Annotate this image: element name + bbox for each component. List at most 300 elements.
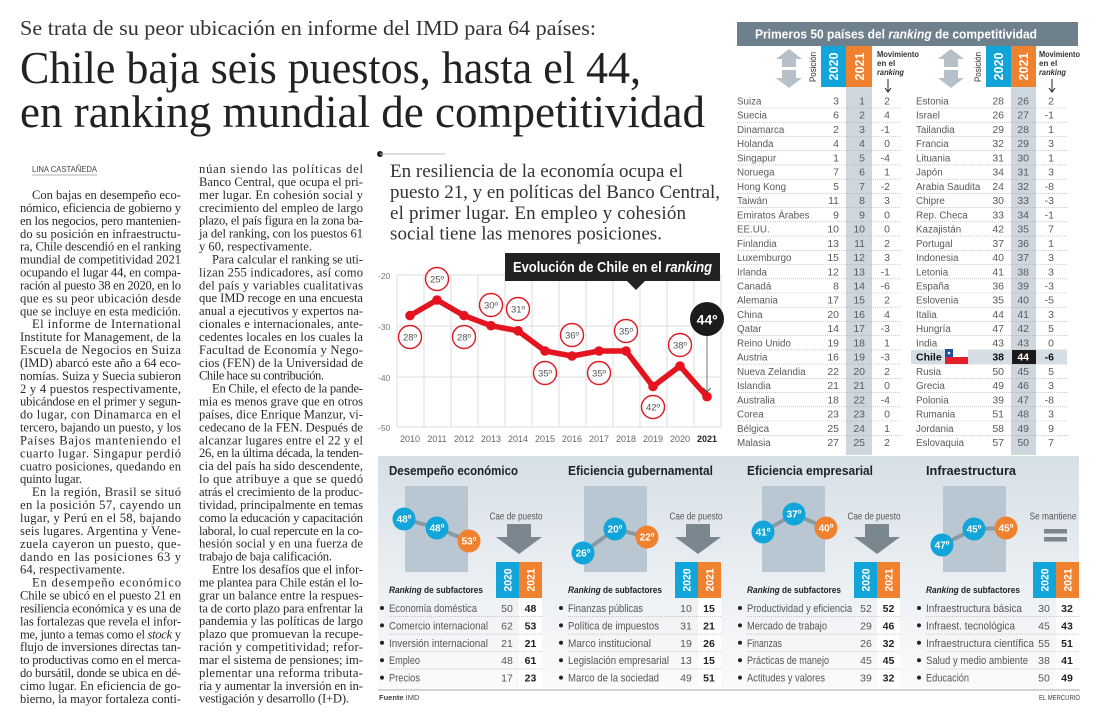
left table rows: 1 [884, 167, 890, 179]
right table rows: 39 [1017, 280, 1029, 292]
left table rows: Irlanda [737, 267, 768, 278]
left table rows: Suecia [737, 111, 768, 122]
subfactor table: Ranking de subfactores [389, 585, 483, 595]
right table column heads: en el [1039, 59, 1057, 68]
right table rows: Italia [916, 310, 937, 321]
article text column 2: y 60, respectivamente. [199, 240, 312, 254]
left table rows: 27 [827, 437, 839, 449]
article text column 1: en los negocios, pero mantenien- [20, 214, 181, 228]
left table rows: 13 [853, 266, 865, 278]
left table column heads: Movimiento [877, 50, 919, 59]
article text column 1: resiliencia económica y es una de [20, 601, 181, 615]
mini chart: 45º [967, 524, 982, 536]
year axis: 2013 [481, 434, 501, 444]
subfactor table: 2021 [704, 568, 716, 592]
left table rows: Nueva Zelandia [737, 367, 806, 378]
right table rows: Rusia [916, 367, 942, 378]
subfactor table: Ranking de subfactores [568, 585, 662, 595]
year axis: 2017 [589, 434, 609, 444]
right table rows: 5 [1048, 323, 1054, 335]
article text column 2: plazo, el país figura en la zona ba- [199, 214, 363, 228]
article text column 1: dando en las posiciones 63 y [20, 550, 182, 564]
equal sign: se mantiene: Se mantiene [1030, 512, 1077, 522]
right table rows: 38 [1017, 266, 1029, 278]
year axis: 2019 [643, 434, 663, 444]
value labels [398, 268, 692, 418]
right table rows: 49 [992, 380, 1004, 392]
ranking table: primeros 50 países [737, 22, 1080, 455]
table title bar: Primeros 50 países del ranking de competitividad [755, 28, 1037, 42]
mini chart: 45º [999, 524, 1014, 534]
article text column 2: tividad, principalmente en temas [199, 498, 363, 512]
article text column 2: Entre los desafíos que el infor- [212, 562, 363, 576]
left table rows: 16 [853, 309, 865, 321]
left table column heads [776, 46, 919, 455]
subfactor table: 17 [501, 673, 513, 685]
subfactor table: 10 [680, 603, 692, 615]
right table rows: 24 [992, 181, 1004, 193]
right table rows: 28 [992, 96, 1004, 108]
left table rows: Qatar [737, 324, 762, 335]
article text column 1: tercero, bajando un puesto, y los [20, 421, 181, 435]
right table column heads: ranking [1039, 68, 1066, 77]
panel: infraestructura [917, 463, 1079, 688]
right table rows: 50 [992, 366, 1004, 378]
left table column heads: Posición [808, 52, 818, 82]
article text column 1: ración al puesto 38 en 2020, en lo [20, 278, 181, 292]
right table rows: 42 [992, 224, 1004, 236]
left table rows: 14 [853, 280, 865, 292]
mini chart [930, 486, 1018, 572]
trend arrow: Cae de puesto [848, 512, 901, 522]
right table rows: 29 [992, 124, 1004, 136]
subfactor table: Infraestructura científica [926, 638, 1035, 650]
subfactor table: Legislación empresarial [568, 655, 669, 667]
left table rows: 10 [853, 224, 865, 236]
mini chart: 20º [608, 524, 623, 536]
subfactor table: 2020 [1040, 568, 1052, 592]
right table rows: 32 [1017, 181, 1029, 193]
footer: source and credit: EL MERCURIO [1039, 695, 1080, 702]
right table rows: 46 [1017, 380, 1029, 392]
subfactor table: 15 [703, 603, 715, 615]
trend arrow: Cae de puesto [670, 512, 723, 522]
right table column heads [938, 46, 1080, 455]
left table rows: Taiwán [737, 196, 768, 207]
article text column 1: 2 y 4 puestos respectivamente, [20, 382, 181, 396]
right table rows: 3 [1048, 266, 1054, 278]
mini chart: 47º [935, 540, 950, 552]
value labels: 28º [457, 332, 472, 344]
article text column 1: En la región, Brasil se situó [32, 485, 181, 499]
subfactor table: 2021 [884, 568, 896, 592]
article text column 2: laboral, lo cual repercute en la co- [199, 524, 363, 538]
highlighted 2021 value [690, 302, 724, 392]
subfactor table: 45 [1038, 620, 1050, 632]
pull quote: el primer lugar. En empleo y cohesión [390, 203, 686, 224]
right table rows: 44 [992, 309, 1004, 321]
left table rows: Malasia [737, 438, 771, 449]
subfactor table: Marco de la sociedad [568, 673, 659, 685]
subfactor table: Política de impuestos [568, 620, 659, 632]
left table rows: Alemania [737, 296, 778, 307]
value labels: 35º [619, 326, 634, 338]
article text column 2: anual a ejecutivos y expertos na- [199, 304, 363, 318]
right table rows: 9 [1048, 423, 1054, 435]
right table rows: 33 [992, 209, 1004, 221]
left table rows: 12 [853, 252, 865, 264]
left table rows: 21 [827, 380, 839, 392]
subfactor table: 55 [1038, 638, 1050, 650]
panel: desempeño económico [380, 463, 543, 688]
article text column 1: me, junto a temas como el stock y [20, 627, 182, 641]
right table rows: 45 [1017, 366, 1029, 378]
subfactor table: Precios [389, 673, 420, 685]
value labels: 36º [565, 330, 580, 342]
article text column 1: do lugar, con Dinamarca en el [20, 408, 182, 422]
right table rows: 1 [1048, 152, 1054, 164]
left table column heads: ranking [877, 68, 904, 77]
left table rows: 7 [859, 181, 865, 193]
left table column heads: en el [877, 59, 895, 68]
value labels: 28º [403, 332, 418, 344]
left table rows: Reino Unido [737, 338, 791, 349]
left table rows: Dinamarca [737, 125, 785, 136]
year axis: 2012 [454, 434, 474, 444]
subfactor table: 45 [883, 655, 894, 667]
right table rows: 7 [1048, 437, 1054, 449]
right table rows: Israel [916, 111, 940, 122]
subfactor table: 49 [680, 673, 692, 685]
right table rows: -1 [1045, 110, 1054, 122]
pull quote: En resiliencia de la economía ocupa el [390, 161, 683, 182]
article text column 1: quinto lugar. [20, 472, 82, 486]
value labels: 35º [538, 368, 553, 380]
left table rows: 21 [853, 380, 865, 392]
table title bar [737, 22, 1078, 46]
trend arrow [848, 512, 901, 554]
left table rows: 15 [853, 295, 865, 307]
right table rows: -1 [1045, 209, 1054, 221]
right table rows: -8 [1045, 181, 1054, 193]
left table rows: 7 [833, 167, 839, 179]
subfactor table: Economía doméstica [389, 603, 478, 615]
subfactor table: 38 [1038, 655, 1050, 667]
pull quote [377, 151, 720, 244]
Chile highlighted row [911, 349, 1067, 364]
subfactor table: Prácticas de manejo [747, 655, 829, 667]
left table rows: Singapur [737, 153, 777, 164]
right table rows: Eslovenia [916, 296, 959, 307]
article text column 1: Con bajas en desempeño eco- [32, 188, 181, 202]
subfactor table: 13 [680, 655, 692, 667]
right table rows: 28 [1017, 124, 1029, 136]
year axis: 2010 [400, 434, 420, 444]
subfactor table [738, 562, 900, 688]
left table rows: 0 [884, 138, 890, 150]
right table rows: 30 [1017, 152, 1029, 164]
right table rows: 57 [992, 437, 1004, 449]
left table rows: 4 [884, 309, 890, 321]
left table rows: 2 [884, 238, 890, 250]
subfactor table: 29 [860, 620, 872, 632]
subfactor table [559, 562, 721, 688]
right table rows: 58 [992, 423, 1004, 435]
subfactor table: Infraest. tecnológica [926, 620, 1016, 632]
article text column 2: hesión social y en una fuerza de [199, 537, 363, 551]
subfactor table: 39 [860, 673, 872, 685]
article text column 1: flujo de inversiones directas tan- [20, 640, 181, 654]
pull quote: social tiene las menores posiciones. [390, 224, 662, 244]
left table rows: 2 [884, 366, 890, 378]
right table rows: Tailandia [916, 125, 955, 136]
left table rows [737, 96, 890, 449]
left table rows: 22 [827, 366, 839, 378]
main title [20, 42, 705, 137]
right table rows: India [916, 338, 938, 349]
left table rows: 22 [853, 394, 865, 406]
line chart: evolución de Chile: -50 [378, 423, 391, 433]
right table rows: 3 [1048, 252, 1054, 264]
year axis: 2021 [697, 434, 717, 444]
article text column 1: ubicándose en el primer y segun- [20, 395, 181, 409]
left table rows: Luxemburgo [737, 253, 792, 264]
right table rows: 37 [1017, 252, 1029, 264]
right table rows: 36 [1017, 238, 1029, 250]
article text column 1: seis lugares. Argentina y Vene- [20, 524, 181, 538]
article text column 1: Chile se ubicó en el puesto 21 en [20, 588, 182, 602]
left table rows: Holanda [737, 139, 774, 150]
right table rows: 3 [1048, 380, 1054, 392]
mini chart: 26º [576, 548, 591, 560]
right table rows: 27 [1017, 110, 1029, 122]
left table rows: 8 [859, 195, 865, 207]
subfactor table: 23 [525, 673, 536, 685]
left table rows: 18 [853, 337, 865, 349]
line chart: evolución de Chile: -20 [378, 271, 391, 281]
left table rows: -4 [881, 394, 890, 406]
right table rows: 50 [1017, 437, 1029, 449]
article text column 1: cuarto lugar. Singapur perdió [20, 446, 181, 460]
right table rows: 35 [1017, 224, 1029, 236]
subfactor table: 2020 [860, 568, 872, 592]
year axis: 2016 [562, 434, 582, 444]
subfactor table: 43 [1061, 620, 1073, 632]
right table rows: 1 [1048, 238, 1054, 250]
left table rows: 1 [859, 96, 865, 108]
left table rows: 0 [884, 209, 890, 221]
subfactor table: 50 [1038, 673, 1050, 685]
right table rows: Portugal [916, 239, 952, 250]
subfactor table: 45 [860, 655, 872, 667]
highlighted 2021 value: 44º [697, 312, 717, 328]
article text column 1: nómico, eficiencia de gobierno y [20, 201, 182, 215]
panel: eficiencia empresarial [738, 463, 901, 688]
article text column 2: Banco Central, que ocupa el pri- [199, 175, 363, 189]
mini chart: 48º [397, 514, 412, 526]
left table rows: 1 [884, 337, 890, 349]
article text column 2: Para calcular el ranking se uti- [212, 252, 363, 266]
article text column 1: en la posición 57, cayendo un [20, 498, 182, 512]
article text column 1: 64, respectivamente. [20, 563, 125, 577]
subfactor table: 51 [1061, 638, 1073, 650]
left table rows: 16 [827, 352, 839, 364]
subfactor table: 21 [703, 620, 715, 632]
left table rows: -6 [881, 280, 890, 292]
right table rows: 40 [1017, 295, 1029, 307]
right table rows: 5 [1048, 366, 1054, 378]
mini chart: 40º [819, 524, 834, 534]
left table rows: 11 [854, 238, 865, 250]
right table rows: 36 [992, 280, 1004, 292]
subfactor table: 41 [1061, 655, 1073, 667]
main title: en ranking mundial de competitividad [20, 86, 705, 137]
article text column 1 [20, 188, 182, 706]
left table rows: 0 [884, 408, 890, 420]
right table rows: 41 [992, 266, 1004, 278]
left table rows: 24 [853, 423, 865, 435]
article text column 2: ta de corto plazo para enfrentar la [199, 601, 363, 615]
left table rows: EE.UU. [737, 225, 770, 236]
subfactor table: Mercado de trabajo [747, 620, 827, 632]
chart title box: Evolución de Chile en el ranking [513, 260, 712, 276]
subfactor table: 32 [883, 638, 894, 650]
left table rows: 2 [833, 124, 839, 136]
left table rows: 9 [833, 209, 839, 221]
article text column 1: que se incluye en esta medición. [20, 304, 181, 318]
right table rows: 34 [1017, 209, 1029, 221]
right table rows: 3 [1048, 309, 1054, 321]
article text column 2: 26, en la última década, la tenden- [199, 446, 363, 460]
article text column 2: crecimiento del empleo de largo [199, 201, 363, 215]
article text column 1: Países Bajos manteniendo el [20, 434, 182, 448]
right table rows: 34 [992, 167, 1004, 179]
mini chart: 41º [756, 528, 771, 538]
right table rows: Jordania [916, 424, 954, 435]
right table rows: Arabia Saudita [916, 182, 981, 193]
subfactor table: Inversión internacional [389, 638, 488, 650]
value labels: 35º [592, 368, 607, 380]
right table rows: 31 [1017, 167, 1029, 179]
subfactor table: Ranking de subfactores [747, 585, 841, 595]
subfactor table: 50 [501, 603, 513, 615]
panel: eficiencia gubernamental [559, 463, 723, 688]
article text column 1: El informe de International [32, 317, 182, 331]
left table rows: 4 [884, 110, 890, 122]
article text column 2: ración y competitividad; refor- [199, 640, 363, 654]
heading: Eficiencia gubernamental [568, 463, 713, 478]
right table rows: 37 [992, 238, 1004, 250]
article text column 2: Chile hace su contribución. [199, 369, 324, 383]
subfactor table: 52 [883, 603, 894, 615]
article text column 2: países, dice Enrique Manzur, vi- [199, 408, 363, 422]
article text column 1: Institute for Management, de la [20, 330, 181, 344]
right table column heads: 2020 [991, 52, 1006, 80]
right table rows: Francia [916, 139, 949, 150]
right table column heads: Posición [973, 52, 983, 82]
pull quote: puesto 21, y en políticas del Banco Central, [390, 182, 720, 203]
left table rows: 3 [884, 252, 890, 264]
left table rows: 0 [884, 224, 890, 236]
right table column heads: 2021 [1016, 52, 1031, 80]
trend arrow [670, 512, 723, 554]
right table rows: 2 [1048, 96, 1054, 108]
right table rows: Hungría [916, 324, 951, 335]
left table rows: China [737, 310, 763, 321]
subfactor table: 2020 [502, 568, 514, 592]
article text column 1: do su posición en infraestructu- [20, 227, 181, 241]
subfactor table: Productividad y eficiencia [747, 603, 853, 615]
left table rows: 2 [884, 295, 890, 307]
subfactor table: 26 [860, 638, 872, 650]
article text column 2: que IMD recoge en una encuesta [199, 291, 363, 305]
heading: Eficiencia empresarial [747, 463, 873, 478]
left table rows: Canadá [737, 282, 772, 292]
right table rows: -8 [1045, 394, 1054, 406]
right table rows: Grecia [916, 381, 945, 392]
article text column 1: que es su peor ubicación desde [20, 291, 181, 305]
mini chart: 53º [462, 536, 477, 548]
subfactor table: 21 [501, 638, 513, 650]
right table rows: 3 [1048, 167, 1054, 179]
article text column 1: mundial de competitividad 2021 [20, 253, 181, 267]
Chile highlighted row: -6 [1045, 352, 1054, 364]
left table rows: Finlandia [737, 239, 777, 250]
chart title box [505, 253, 720, 290]
subfactor table: Infraestructura básica [926, 603, 1023, 615]
line chart: evolución de Chile: -40 [378, 373, 391, 383]
article text column 2: atrás el crecimiento de la produc- [199, 485, 363, 499]
right table rows: 32 [992, 138, 1004, 150]
trend arrow [490, 512, 543, 554]
subfactor table: 19 [680, 638, 692, 650]
right table rows: -3 [1045, 195, 1054, 207]
right table rows: 31 [992, 152, 1004, 164]
value labels: 31º [511, 304, 526, 316]
Chile highlighted row: 44 [1017, 352, 1029, 364]
left table rows: 3 [833, 96, 839, 108]
left table rows: 10 [827, 224, 839, 236]
value labels: 30º [484, 300, 499, 312]
left table rows: 20 [853, 366, 865, 378]
article text column 1: cuatro posiciones, quedando en [20, 459, 182, 473]
right table rows: Rep. Checa [916, 210, 968, 221]
article text column 1: to productivas como en el merca- [20, 653, 181, 667]
article text column 1: Escuela de Negocios en Suiza [20, 343, 181, 357]
subfactor table: 62 [501, 620, 513, 632]
right table rows: Lituania [916, 153, 951, 164]
left table rows: Austria [737, 353, 768, 364]
left table rows: Noruega [737, 168, 775, 179]
left table rows: -3 [881, 323, 890, 335]
article text column 1: bierno, la mayor fortaleza conti- [20, 692, 181, 706]
mini chart [392, 486, 480, 572]
left table rows: 12 [827, 266, 839, 278]
article text column 2: En Chile, el efecto de la pande- [212, 382, 363, 396]
article text column 2: cionales e internacionales, ante- [199, 317, 363, 331]
article text column 2: grar un balance entre la respues- [199, 588, 363, 602]
left table rows: Suiza [737, 96, 762, 108]
value labels: 25º [430, 274, 445, 286]
subfactor table: 2020 [682, 568, 694, 592]
right table rows: 49 [1017, 423, 1029, 435]
article text column 1: ra, Chile descendió en el ranking [20, 240, 182, 254]
subfactor table: 52 [860, 603, 872, 615]
article text column 2: lo que atribuye a que se quedó [199, 472, 363, 486]
right table rows: 42 [1017, 323, 1029, 335]
article text column 2 [198, 162, 364, 706]
subfactor table: 32 [883, 673, 894, 685]
